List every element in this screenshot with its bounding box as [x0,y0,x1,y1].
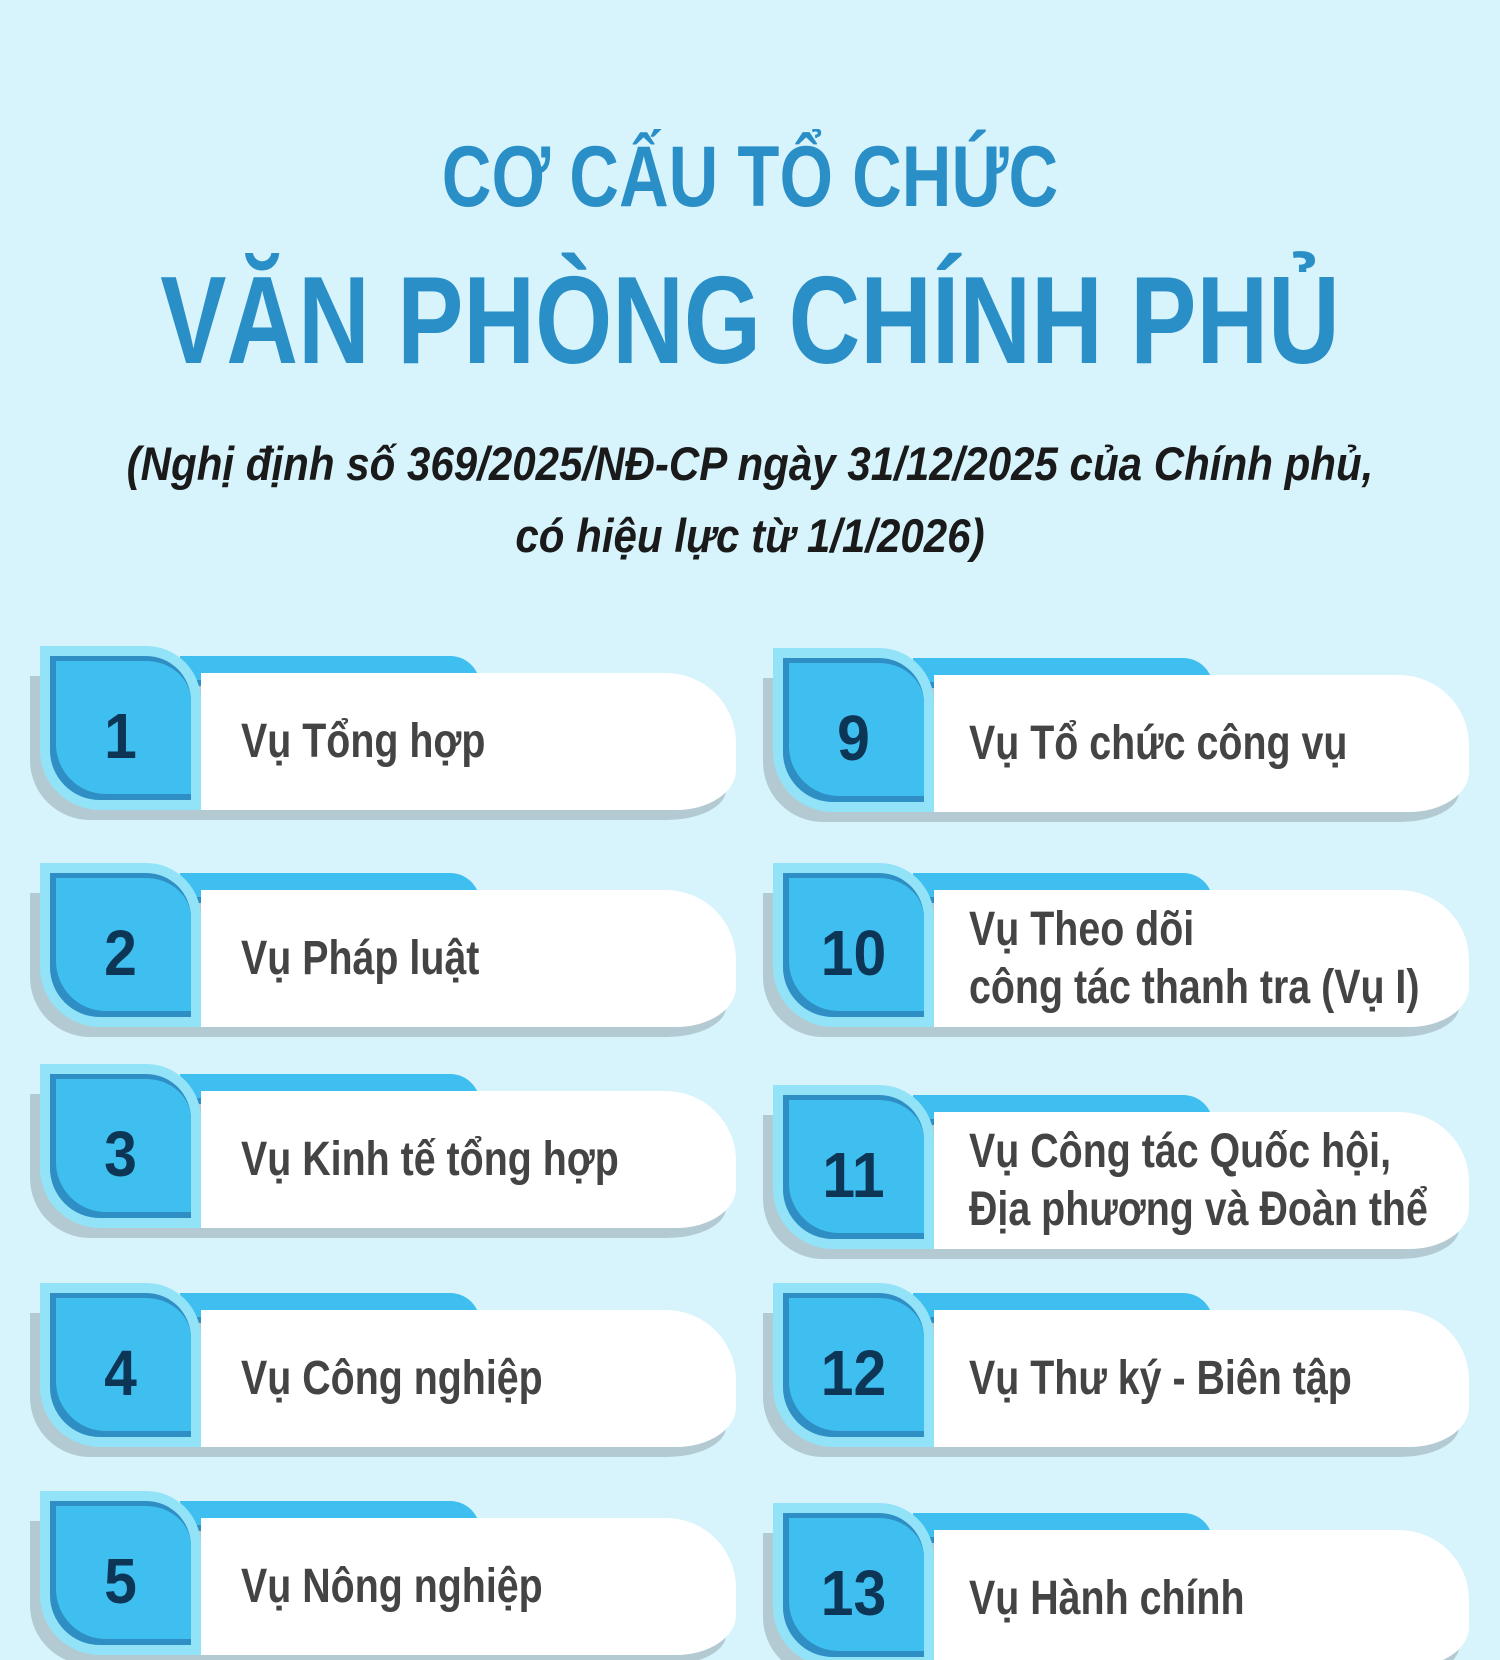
card 5: Vụ Nông nghiệp [241,1560,543,1613]
title line 1: CƠ CẤU TỔ CHỨC [442,129,1058,225]
title line 2: VĂN PHÒNG CHÍNH PHỦ [160,252,1340,390]
card 13 [763,1503,1469,1660]
card 4 [30,1283,736,1457]
card 11 [763,1085,1469,1259]
card 1 [30,646,736,820]
card 9: Vụ Tổ chức công vụ [969,717,1347,770]
card 1: 1 [104,700,137,772]
subtitle [127,437,1373,562]
card 10: công tác thanh tra (Vụ I) [969,960,1419,1014]
card 3: Vụ Kinh tế tổng hợp [241,1133,619,1186]
card 13: Vụ Hành chính [969,1572,1245,1625]
card 4: Vụ Công nghiệp [241,1352,543,1405]
card 10 [763,863,1469,1037]
card 9 [763,648,1469,822]
card 13: 13 [821,1557,886,1629]
card 1: Vụ Tổng hợp [241,715,485,768]
card 5 [30,1491,736,1660]
card 2: Vụ Pháp luật [241,932,479,985]
card 12: Vụ Thư ký - Biên tập [969,1352,1352,1405]
card 12: 12 [821,1337,886,1409]
subtitle: (Nghị định số 369/2025/NĐ-CP ngày 31/12/2025 của Chính phủ, [127,437,1373,490]
card 10: 10 [821,917,886,989]
card 10: Vụ Theo dõi [969,903,1194,956]
card 12 [763,1283,1469,1457]
card 2: 2 [104,917,137,989]
subtitle: có hiệu lực từ 1/1/2026) [515,509,985,562]
card 3: 3 [104,1118,137,1190]
card 3 [30,1064,736,1238]
card 11: Địa phương và Đoàn thể [969,1182,1428,1236]
card 2 [30,863,736,1037]
card 5: 5 [104,1545,137,1617]
card 11: 11 [822,1139,885,1211]
card 4: 4 [104,1337,137,1409]
card 11: Vụ Công tác Quốc hội, [969,1125,1391,1178]
card 9: 9 [837,702,870,774]
